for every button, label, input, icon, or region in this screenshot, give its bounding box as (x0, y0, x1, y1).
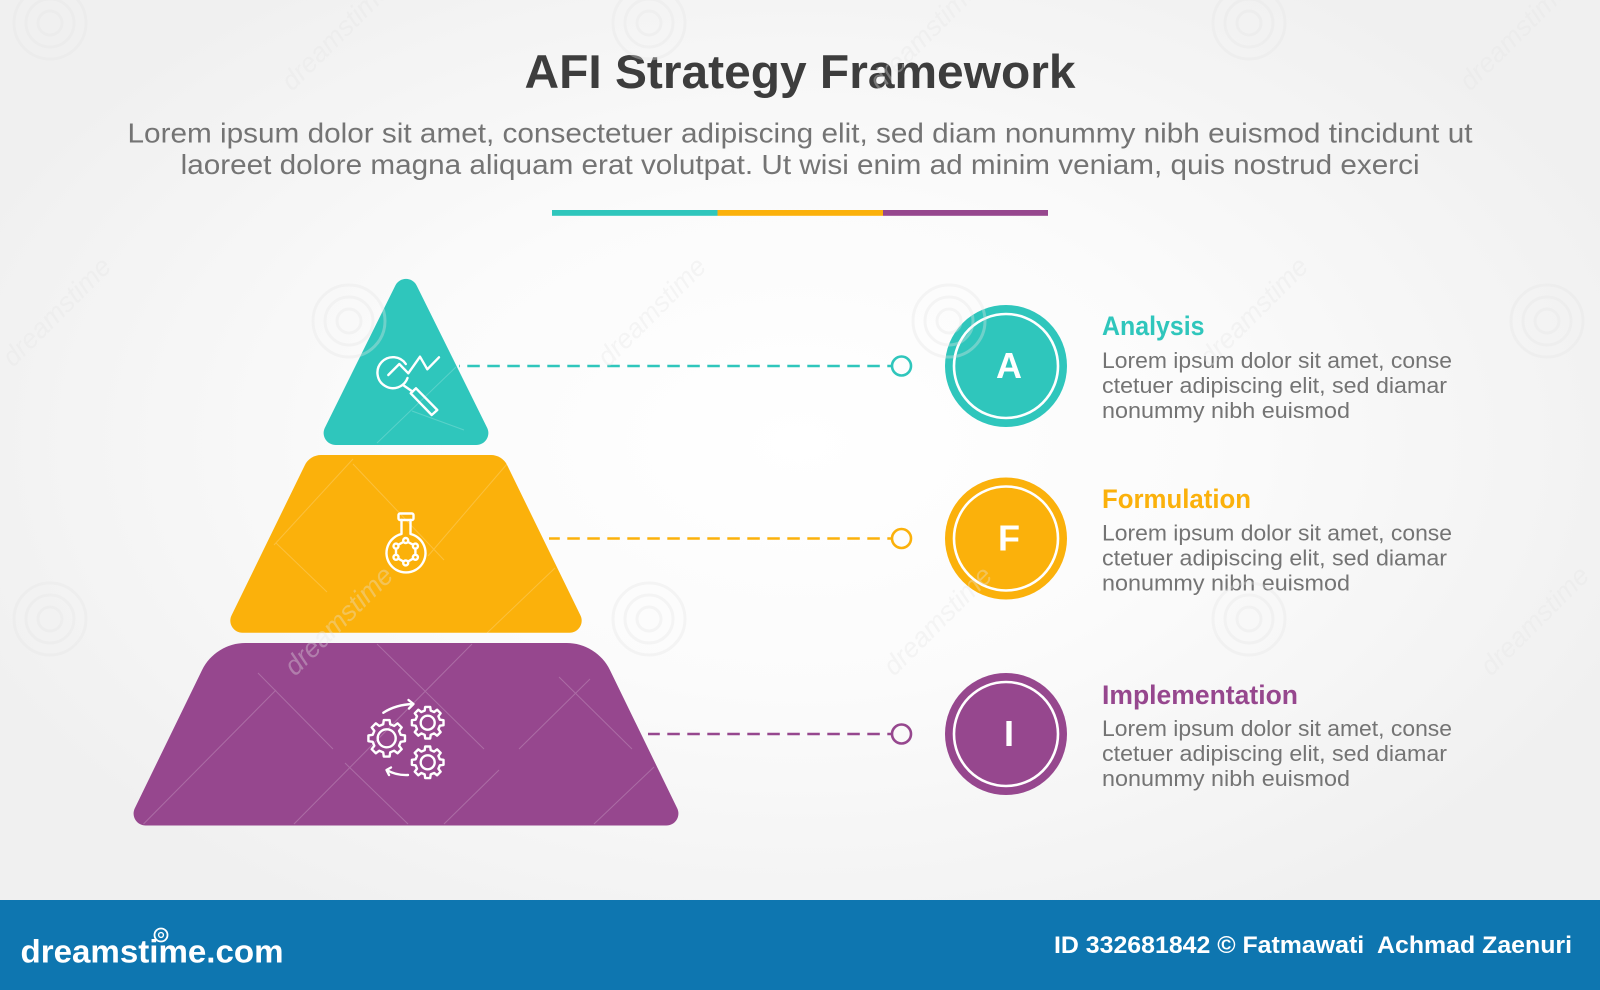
connector: implementation (648, 724, 911, 744)
pyramid tier: analysis (324, 279, 488, 445)
pyramid (134, 279, 678, 826)
text block: Implementation (1102, 680, 1452, 791)
text block: Analysis: Lorem ipsum dolor sit amet, conse (1102, 348, 1452, 373)
text block: Analysis: nonummy nibh euismod (1102, 398, 1350, 423)
subtitle text block: Lorem ipsum dolor sit amet, consectetuer adipiscing elit, sed diam nonummy nibh euismod tincidunt ut (128, 118, 1473, 148)
icon: magnifier over chart (377, 357, 439, 415)
watermark overlay: dreamstime (1474, 560, 1595, 681)
connector: formulation (549, 529, 911, 548)
watermark overlay: dreamstime (278, 560, 399, 681)
text block: Formulation (1102, 484, 1452, 596)
watermark overlay: dreamstime (877, 560, 998, 681)
watermark overlay: dreamstime (1193, 251, 1314, 372)
watermark overlay: dreamstime (591, 251, 712, 372)
tri-colour divider bar (552, 210, 1048, 216)
text block: Implementation: Lorem ipsum dolor sit amet, conse (1102, 716, 1452, 741)
subtitle text block: laoreet dolore magna aliquam erat volutpat. Ut wisi enim ad minim veniam, quis nostrud exerci (181, 149, 1420, 180)
text block: Formulation: Formulation (1102, 484, 1251, 514)
title: AFI Strategy Framework (524, 45, 1076, 98)
text block: Analysis: ctetuer adipiscing elit, sed diamar (1102, 373, 1447, 398)
badge: F (945, 478, 1067, 600)
badge: A: A (996, 345, 1022, 386)
pyramid tier: formulation (230, 455, 582, 633)
text block: Analysis: Analysis (1102, 311, 1204, 341)
badge: I (945, 673, 1067, 795)
text block: Formulation: Lorem ipsum dolor sit amet, conse (1102, 520, 1452, 546)
text block: Formulation: nonummy nibh euismod (1102, 570, 1350, 596)
text block: Analysis (1102, 311, 1452, 423)
footer logo: dreamstime.com (20, 934, 284, 970)
connector: analysis (459, 356, 911, 376)
icon: gears with arrows (368, 700, 444, 778)
icon: flask (387, 514, 426, 572)
text block: Implementation: nonummy nibh euismod (1102, 766, 1350, 791)
text block: Implementation: Implementation (1102, 680, 1298, 710)
subtitle text block (128, 118, 1473, 180)
text block: Implementation: ctetuer adipiscing elit, sed diamar (1102, 741, 1447, 766)
text block: Formulation: ctetuer adipiscing elit, sed diamar (1102, 546, 1447, 570)
pyramid tier: implementation (134, 643, 678, 826)
badge: I: I (1004, 713, 1014, 754)
badge: A (945, 305, 1067, 427)
badge: F: F (998, 518, 1020, 558)
footer credit: ID 332681842 © Fatmawati Achmad Zaenuri (1054, 932, 1572, 959)
footer band (0, 900, 1600, 990)
